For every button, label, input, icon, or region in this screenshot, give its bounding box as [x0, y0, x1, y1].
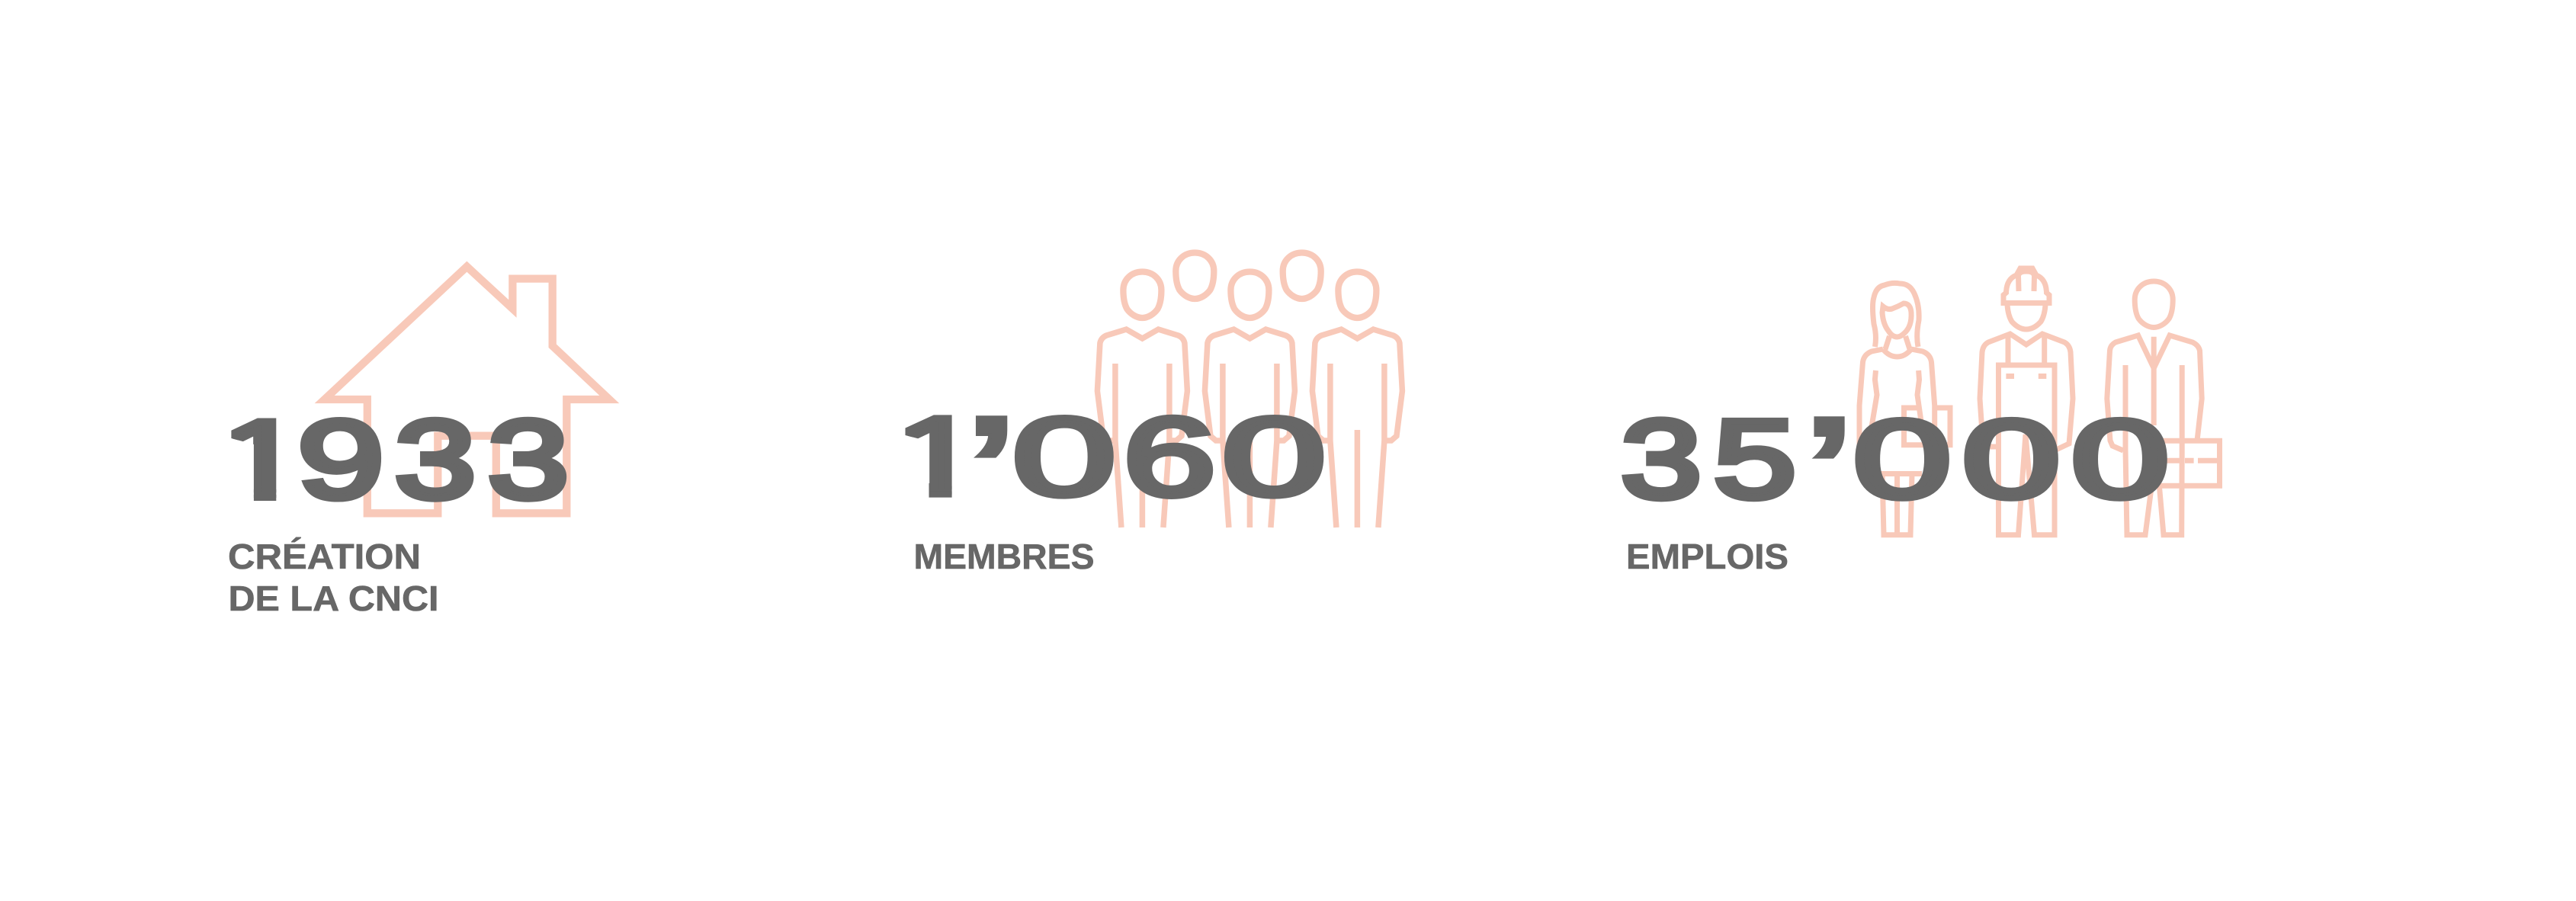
icon: businessman with briefcase	[2107, 281, 2220, 535]
label: membres: MEMBRES	[913, 537, 1095, 576]
icon: woman with bag	[1859, 283, 1950, 535]
number: 1933: 9	[297, 397, 384, 521]
label: emplois: EMPLOIS	[1626, 537, 1788, 576]
panel: creation 1933	[217, 267, 609, 618]
number: 1'060	[906, 415, 1323, 499]
number: 35'000: 5	[1714, 397, 1796, 521]
label: création de la CNCI	[228, 537, 439, 618]
number: 35'000: 0	[1962, 397, 2061, 521]
number: 1'060: ’	[964, 387, 1019, 544]
panel: emplois 35'000	[1621, 268, 2220, 576]
icon: construction worker	[1980, 268, 2073, 535]
number: 1'060: 6	[1123, 396, 1216, 519]
number: 35'000: ’	[1802, 388, 1856, 545]
icon: group of five people	[1097, 253, 1402, 527]
label: création de la CNCI: CRÉATION	[228, 537, 421, 576]
number: 1'060: 0	[1221, 395, 1326, 519]
number: 1933: 3	[488, 397, 569, 521]
number: 35'000: 0	[1853, 397, 1952, 521]
number: 1933	[231, 416, 567, 502]
label: création de la CNCI: DE LA CNCI	[229, 579, 439, 618]
number: 1'060: 0	[1012, 395, 1116, 519]
icon: three workers	[1859, 268, 2220, 535]
icon: house outline	[325, 267, 609, 513]
number: 1933: 3	[395, 398, 476, 522]
panel: membres 1'060	[892, 253, 1402, 576]
number: 1'060: 1	[892, 395, 985, 518]
number: 1933: 1	[217, 397, 307, 521]
number: 35'000: 0	[2071, 397, 2170, 521]
number: 35'000	[1621, 388, 2170, 545]
number: 35'000: 3	[1621, 397, 1702, 521]
